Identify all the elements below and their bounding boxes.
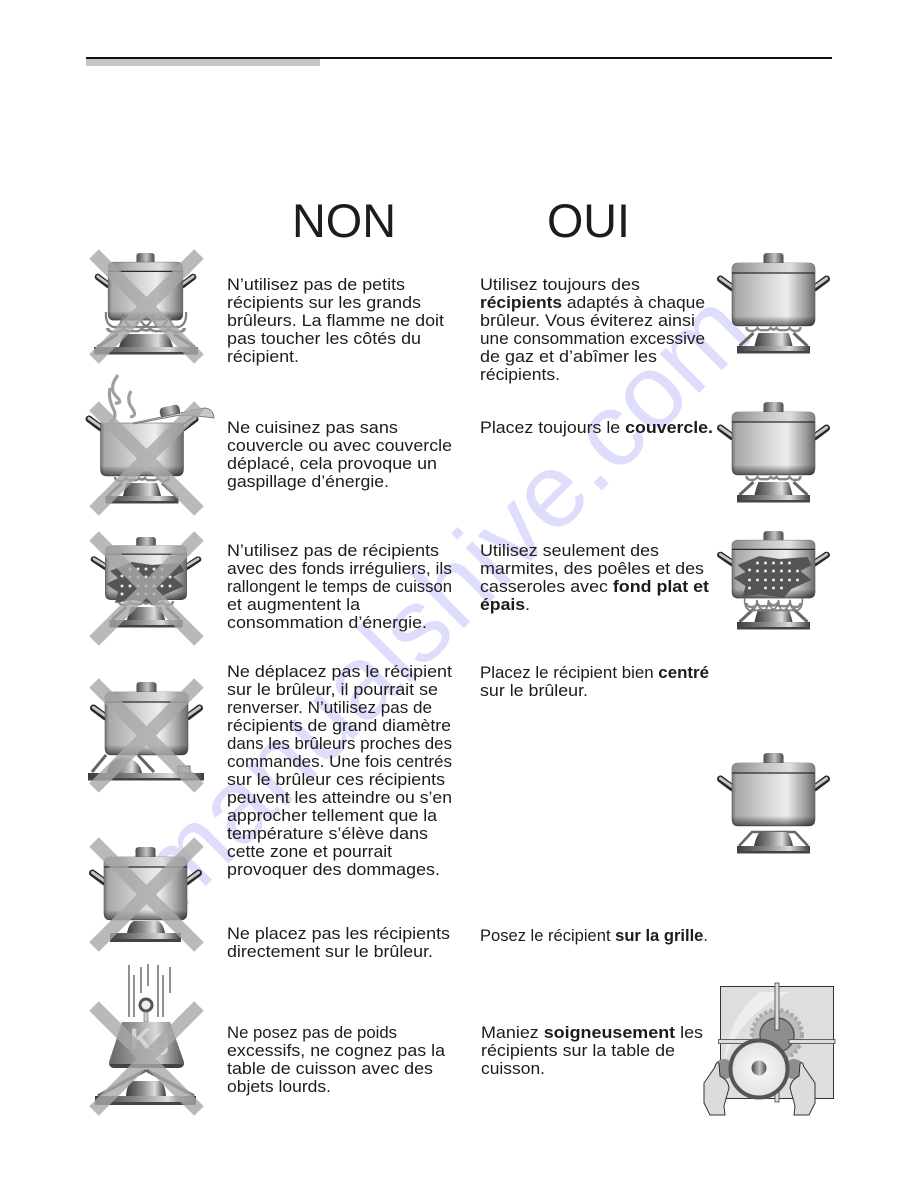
text: adapted pots: récipients adaptés à chaque: [480, 293, 705, 312]
top rule: [86, 57, 832, 66]
text: irregular bottoms warning: et augmentent la: [227, 595, 361, 614]
text: handle with care: [481, 1023, 703, 1078]
text: always lid: Placez toujours le couvercle.: [480, 418, 713, 437]
text: small pots warning: [227, 275, 444, 366]
text: irregular bottoms warning: [227, 541, 452, 632]
icon: centred pot on burner: [720, 753, 826, 854]
text: moving pot warning: [227, 662, 452, 879]
text: moving pot warning: approcher tellement que la: [227, 806, 438, 825]
text: moving pot warning: sur le brûleur, il pourrait se: [227, 680, 438, 699]
text: no direct burner contact: Ne placez pas les récipients: [227, 924, 450, 943]
text: irregular bottoms warning: rallongent le temps de cuisson: [227, 577, 452, 596]
text: heavy weights warning: Ne posez pas de poids: [227, 1023, 397, 1042]
text: adapted pots: de gaz et d’abîmer les: [480, 347, 657, 366]
text: moving pot warning: dans les brûleurs proches des: [227, 734, 452, 753]
text: lid warning: Ne cuisinez pas sans: [227, 418, 398, 437]
icon: correct pot on burner 1: [720, 253, 826, 354]
text: heavy weights warning: objets lourds.: [227, 1077, 331, 1096]
text: centre the pot: [480, 663, 709, 700]
text: small pots warning: récipients sur les grands: [227, 293, 421, 312]
text: centre the pot: sur le brûleur.: [480, 681, 588, 700]
text: moving pot warning: cette zone et pourrait: [227, 842, 392, 861]
heading: NON: NON: [292, 195, 396, 248]
text: handle with care: récipients sur la table de: [481, 1041, 675, 1060]
text: no direct burner contact: [227, 924, 450, 961]
text: lid warning: gaspillage d’énergie.: [227, 472, 389, 491]
icon: pot with irregular bottom, crossed: [94, 536, 199, 641]
text: flat bottoms: marmites, des poêles et des: [480, 559, 704, 578]
text: small pots warning: brûleurs. La flamme ne doit: [227, 311, 444, 330]
text: no direct burner contact: directement sur le brûleur.: [227, 942, 433, 961]
text: irregular bottoms warning: N’utilisez pas de récipients: [227, 541, 439, 560]
text: lid warning: couvercle ou avec couvercle: [227, 436, 452, 455]
text: irregular bottoms warning: avec des fonds irréguliers, ils: [227, 559, 452, 578]
text: adapted pots: Utilisez toujours des: [480, 275, 640, 294]
icon: small pot on large burner, crossed: [94, 253, 199, 359]
text: moving pot warning: température s’élève dans: [227, 824, 428, 843]
text: adapted pots: [480, 275, 705, 384]
icon: pot with displaced lid and steam, crossed: [89, 375, 214, 511]
text: place on grate: Posez le récipient sur la grille.: [480, 926, 708, 945]
text: moving pot warning: Ne déplacez pas le récipient: [227, 662, 452, 681]
icon: falling weight on burner, crossed: [94, 964, 199, 1111]
text: heavy weights warning: excessifs, ne cognez pas la: [227, 1041, 446, 1060]
text: moving pot warning: sur le brûleur ces récipients: [227, 770, 445, 789]
icon: off-centre pot near controls, crossed: [88, 682, 204, 788]
text: handle with care: Maniez soigneusement les: [481, 1023, 703, 1042]
text: small pots warning: récipient.: [227, 347, 299, 366]
text: adapted pots: récipients.: [480, 365, 560, 384]
icon: correct pot with lid: [720, 402, 826, 502]
heading: OUI: OUI: [547, 195, 630, 248]
text: handle with care: cuisson.: [481, 1059, 545, 1078]
text: lid warning: [227, 418, 452, 491]
text: centre the pot: Placez le récipient bien centré: [480, 663, 709, 682]
text: small pots warning: N’utilisez pas de petits: [227, 275, 405, 294]
text: flat bottoms: [480, 541, 709, 614]
text: heavy weights warning: [227, 1023, 446, 1096]
text: flat bottoms: casseroles avec fond plat et: [480, 577, 709, 596]
text: moving pot warning: commandes. Une fois centrés: [227, 752, 452, 771]
text: moving pot warning: renverser. N’utilisez pas de: [227, 698, 432, 717]
icon: falling weight on burner, crossed: Kg: [130, 1023, 170, 1056]
text: moving pot warning: peuvent les atteindre ou s’en: [227, 788, 452, 807]
text: moving pot warning: récipients de grand diamètre: [227, 716, 451, 735]
text: heavy weights warning: table de cuisson avec des: [227, 1059, 433, 1078]
icon: hands placing pot on hob: [704, 983, 835, 1115]
text: lid warning: déplacé, cela provoque un: [227, 454, 437, 473]
icon: flat thick bottom pot: [720, 531, 826, 630]
icon: pot directly on burner, crossed: [92, 842, 199, 947]
text: adapted pots: brûleur. Vous éviterez ainsi: [480, 311, 695, 330]
text: adapted pots: une consommation excessive: [480, 329, 705, 348]
text: flat bottoms: Utilisez seulement des: [480, 541, 659, 560]
text: flat bottoms: épais.: [480, 595, 530, 614]
text: small pots warning: pas toucher les côtés du: [227, 329, 421, 348]
watermark: manualshive.com: [112, 270, 772, 930]
text: moving pot warning: provoquer des dommages.: [227, 860, 440, 879]
text: irregular bottoms warning: consommation d’énergie.: [227, 613, 427, 632]
